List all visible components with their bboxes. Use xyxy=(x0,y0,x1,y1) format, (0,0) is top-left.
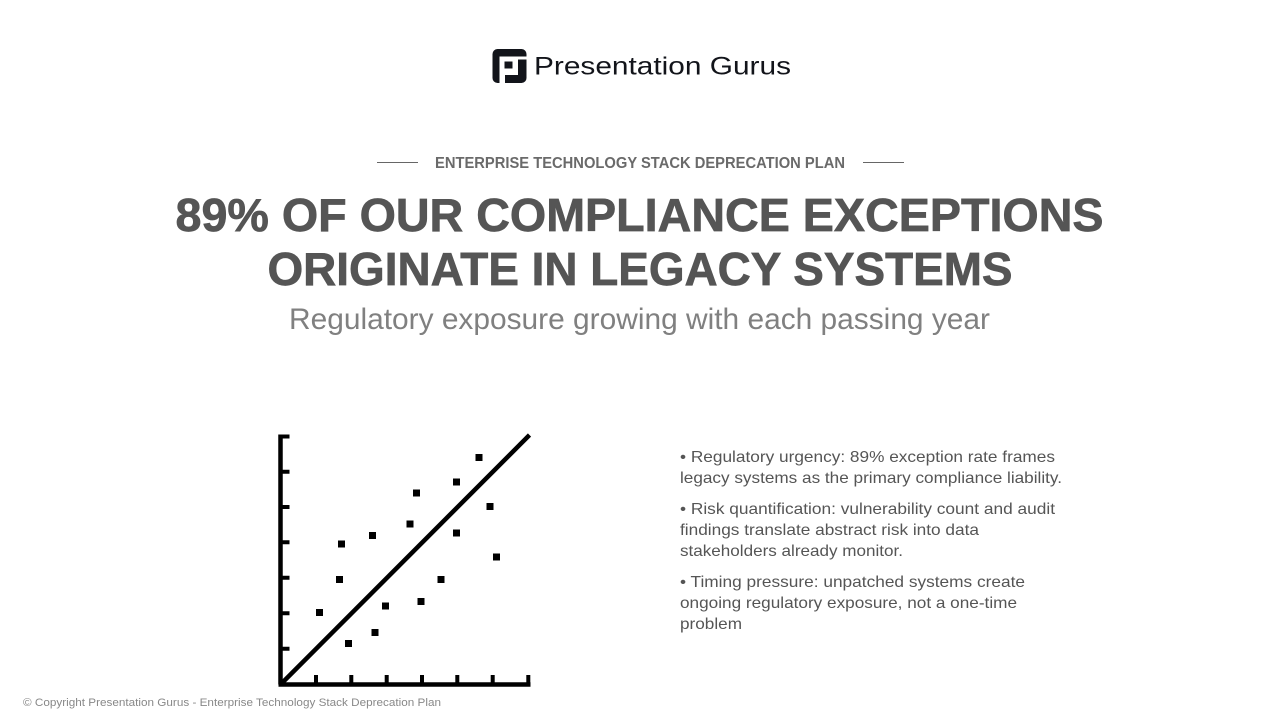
logo: Presentation Gurus xyxy=(492,49,791,83)
bullet: risk quantification: stakeholders already monitor. xyxy=(680,543,903,560)
subtitle: Regulatory exposure growing with each passing year xyxy=(289,303,990,336)
eyebrow heading with rules: ENTERPRISE TECHNOLOGY STACK DEPRECATION PLAN xyxy=(435,155,845,172)
bullet: risk quantification xyxy=(680,501,1056,560)
trend line xyxy=(281,435,530,684)
icon: logo mark xyxy=(492,49,526,83)
title: ORIGINATE IN LEGACY SYSTEMS xyxy=(268,243,1012,295)
scatter chart icon xyxy=(278,434,530,684)
bullet list xyxy=(680,449,1062,633)
bullet: risk quantification: findings translate abstract risk into data xyxy=(680,522,979,539)
title: 89% OF OUR COMPLIANCE EXCEPTIONS xyxy=(176,189,1104,241)
title xyxy=(176,189,1104,295)
bullet: timing pressure: • Timing pressure: unpatched systems create xyxy=(680,574,1025,591)
bullet: regulatory urgency: legacy systems as the primary compliance liability. xyxy=(680,470,1062,487)
bullet: timing pressure xyxy=(680,574,1025,633)
logo wordmark: Presentation Gurus xyxy=(534,52,791,80)
chart axes and ticks xyxy=(280,436,528,683)
bullet: risk quantification: • Risk quantification: vulnerability count and audit xyxy=(680,501,1056,518)
bullet: regulatory urgency xyxy=(680,449,1062,487)
footer copyright: © Copyright Presentation Gurus - Enterprise Technology Stack Deprecation Plan xyxy=(23,697,441,709)
scatter points xyxy=(316,454,500,647)
bullet: timing pressure: ongoing regulatory exposure, not a one-time xyxy=(680,595,1017,612)
bullet: regulatory urgency: • Regulatory urgency: 89% exception rate frames xyxy=(680,449,1055,466)
bullet: timing pressure: problem xyxy=(680,616,742,633)
